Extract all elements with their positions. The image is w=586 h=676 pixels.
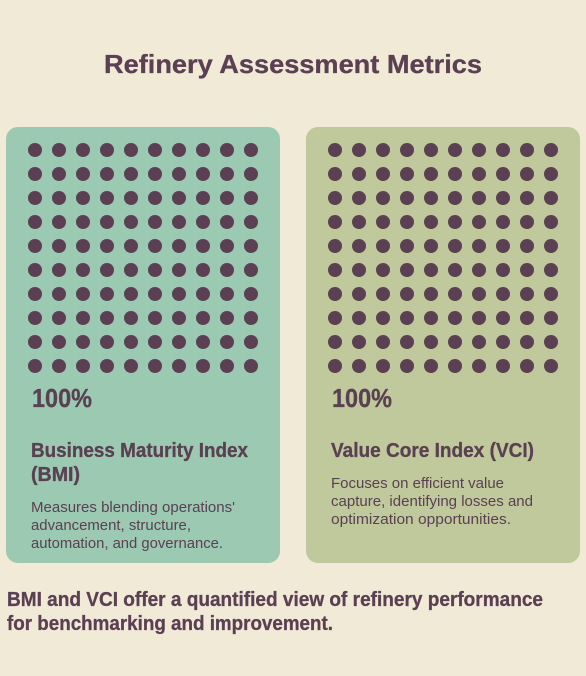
heading: BMI: Business Maturity Index: [31, 439, 249, 462]
title: Refinery Assessment Metrics: [104, 49, 482, 79]
heading: BMI: (BMI): [31, 463, 80, 486]
percentage: VCI: 100%: [332, 383, 392, 413]
panel: Value Core Index: [306, 127, 580, 563]
percentage: BMI: 100%: [32, 383, 92, 413]
description: BMI: advancement, structure,: [31, 517, 191, 534]
description: BMI: Measures blending operations': [31, 499, 235, 516]
dot grid: BMI 100%: [28, 143, 258, 373]
description: VCI: optimization opportunities.: [331, 511, 511, 528]
description: VCI: Focuses on efficient value: [331, 475, 504, 492]
summary statement: for benchmarking and improvement.: [7, 612, 333, 635]
panel background: VCI: [306, 127, 580, 563]
dot grid: VCI 100%: [328, 143, 558, 373]
heading: VCI: Value Core Index (VCI): [331, 439, 534, 462]
summary statement: BMI and VCI offer a quantified view of refinery performance: [7, 588, 543, 611]
panel background: BMI: [6, 127, 280, 563]
description: BMI: automation, and governance.: [31, 535, 223, 552]
panel: Business Maturity Index: [6, 127, 280, 563]
description: VCI: capture, identifying losses and: [331, 493, 533, 510]
